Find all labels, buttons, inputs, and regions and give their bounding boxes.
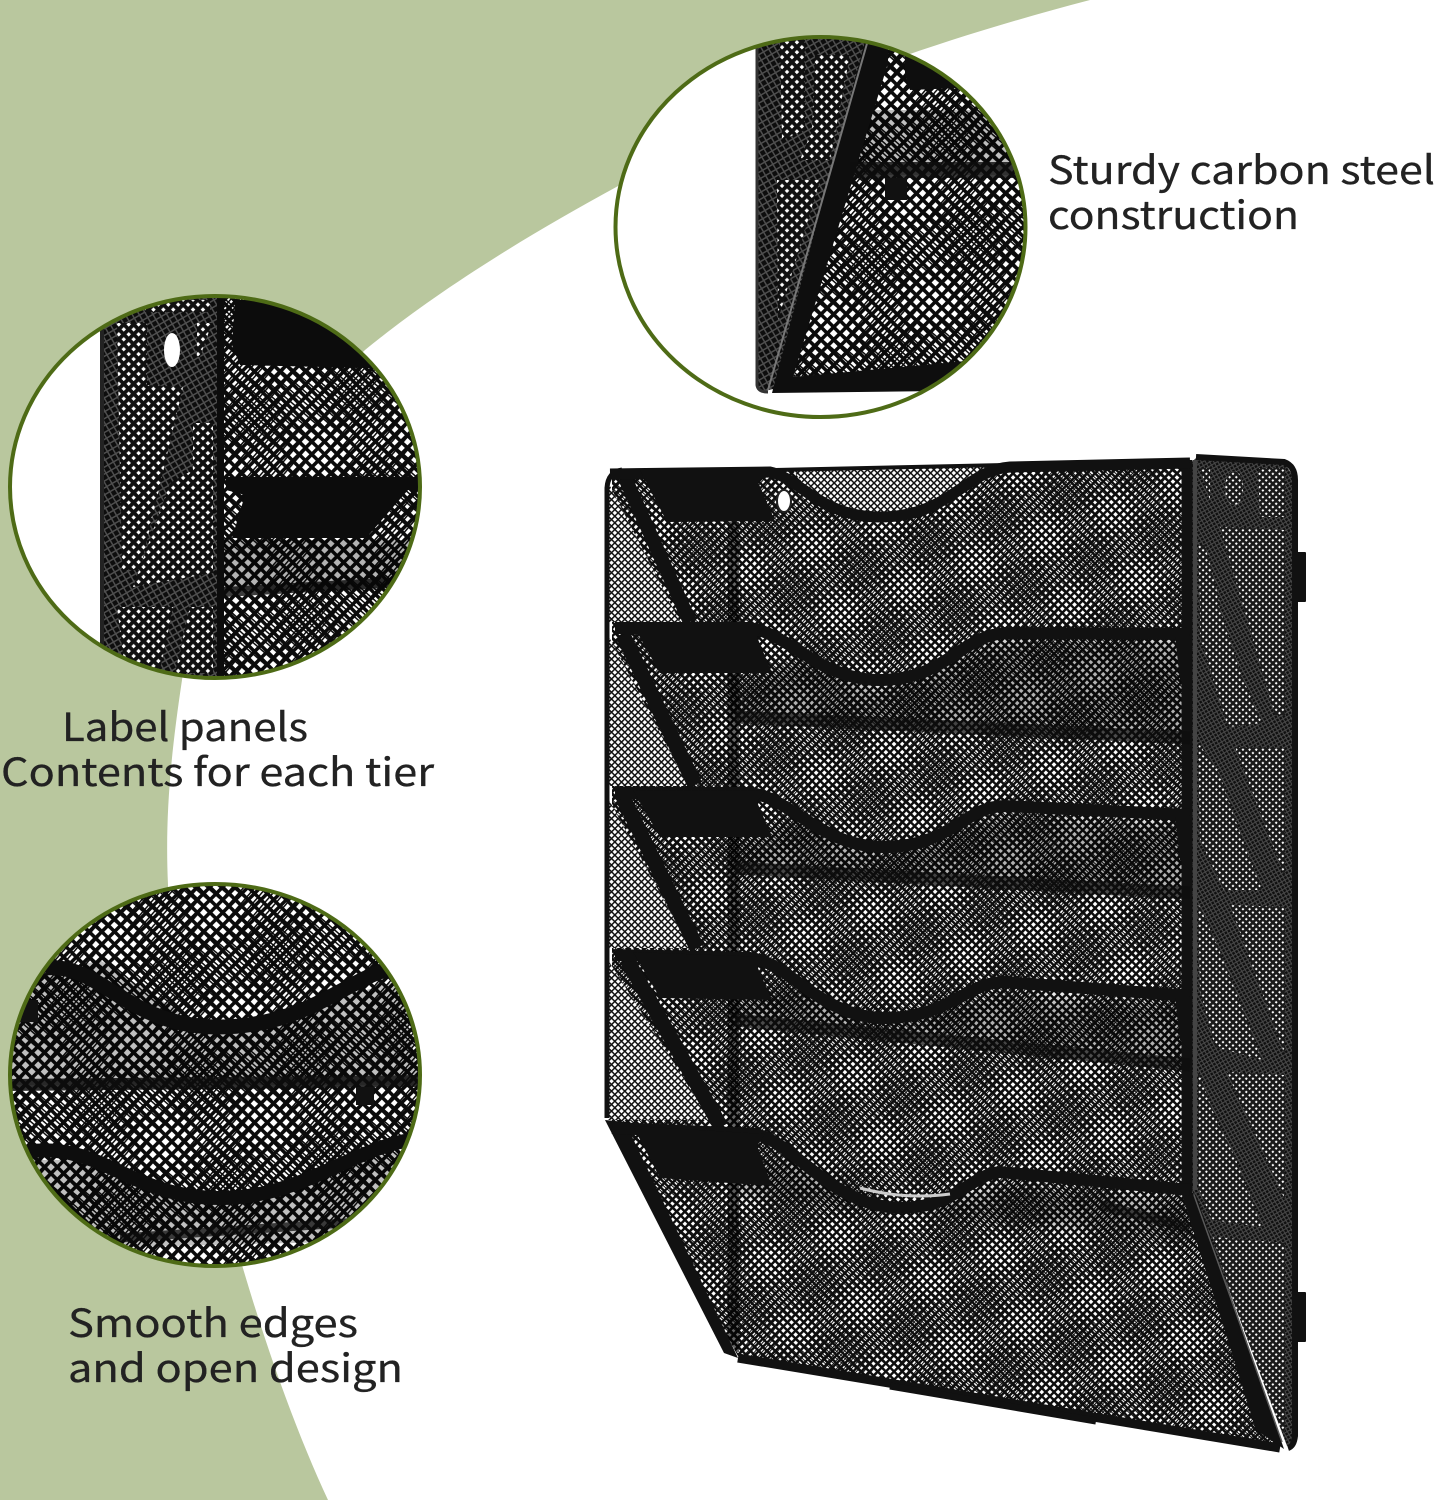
- caption: smooth edges: Smooth edges: [68, 1293, 358, 1349]
- tier 2 edge and label panel: [615, 625, 1190, 690]
- caption: label panels: Contents for each tier: [1, 742, 435, 798]
- tier 3 edge and label panel: [615, 790, 1190, 870]
- tier 5 edge and label panel: [612, 1126, 1190, 1208]
- detail circle: label panels: [10, 290, 422, 685]
- back mesh: [600, 450, 1300, 1460]
- detail circle: smooth edges: [5, 880, 425, 1275]
- wall mount tabs: [1297, 552, 1306, 1342]
- tier 1 edge and label panel: [610, 463, 1190, 522]
- caption: smooth edges: [68, 1293, 403, 1394]
- frame: [605, 460, 1284, 1449]
- caption: label panels: [1, 697, 435, 798]
- caption: label panels: Label panels: [62, 697, 308, 753]
- side panel: [1190, 450, 1300, 1450]
- caption: carbon steel: Sturdy carbon steel: [1048, 140, 1435, 196]
- tier 4 edge and label panel: [615, 952, 1190, 1050]
- caption: smooth edges: and open design: [68, 1338, 403, 1394]
- left side wedges of light mesh: [608, 482, 710, 1120]
- background: green curved shape: [0, 0, 1090, 1500]
- caption: carbon steel: [1048, 140, 1435, 241]
- caption: carbon steel: construction: [1048, 185, 1299, 241]
- detail circle: carbon steel corner: [616, 30, 1030, 417]
- shelf creases: [735, 717, 1190, 1228]
- panel: wall file organizer product: [600, 450, 1306, 1460]
